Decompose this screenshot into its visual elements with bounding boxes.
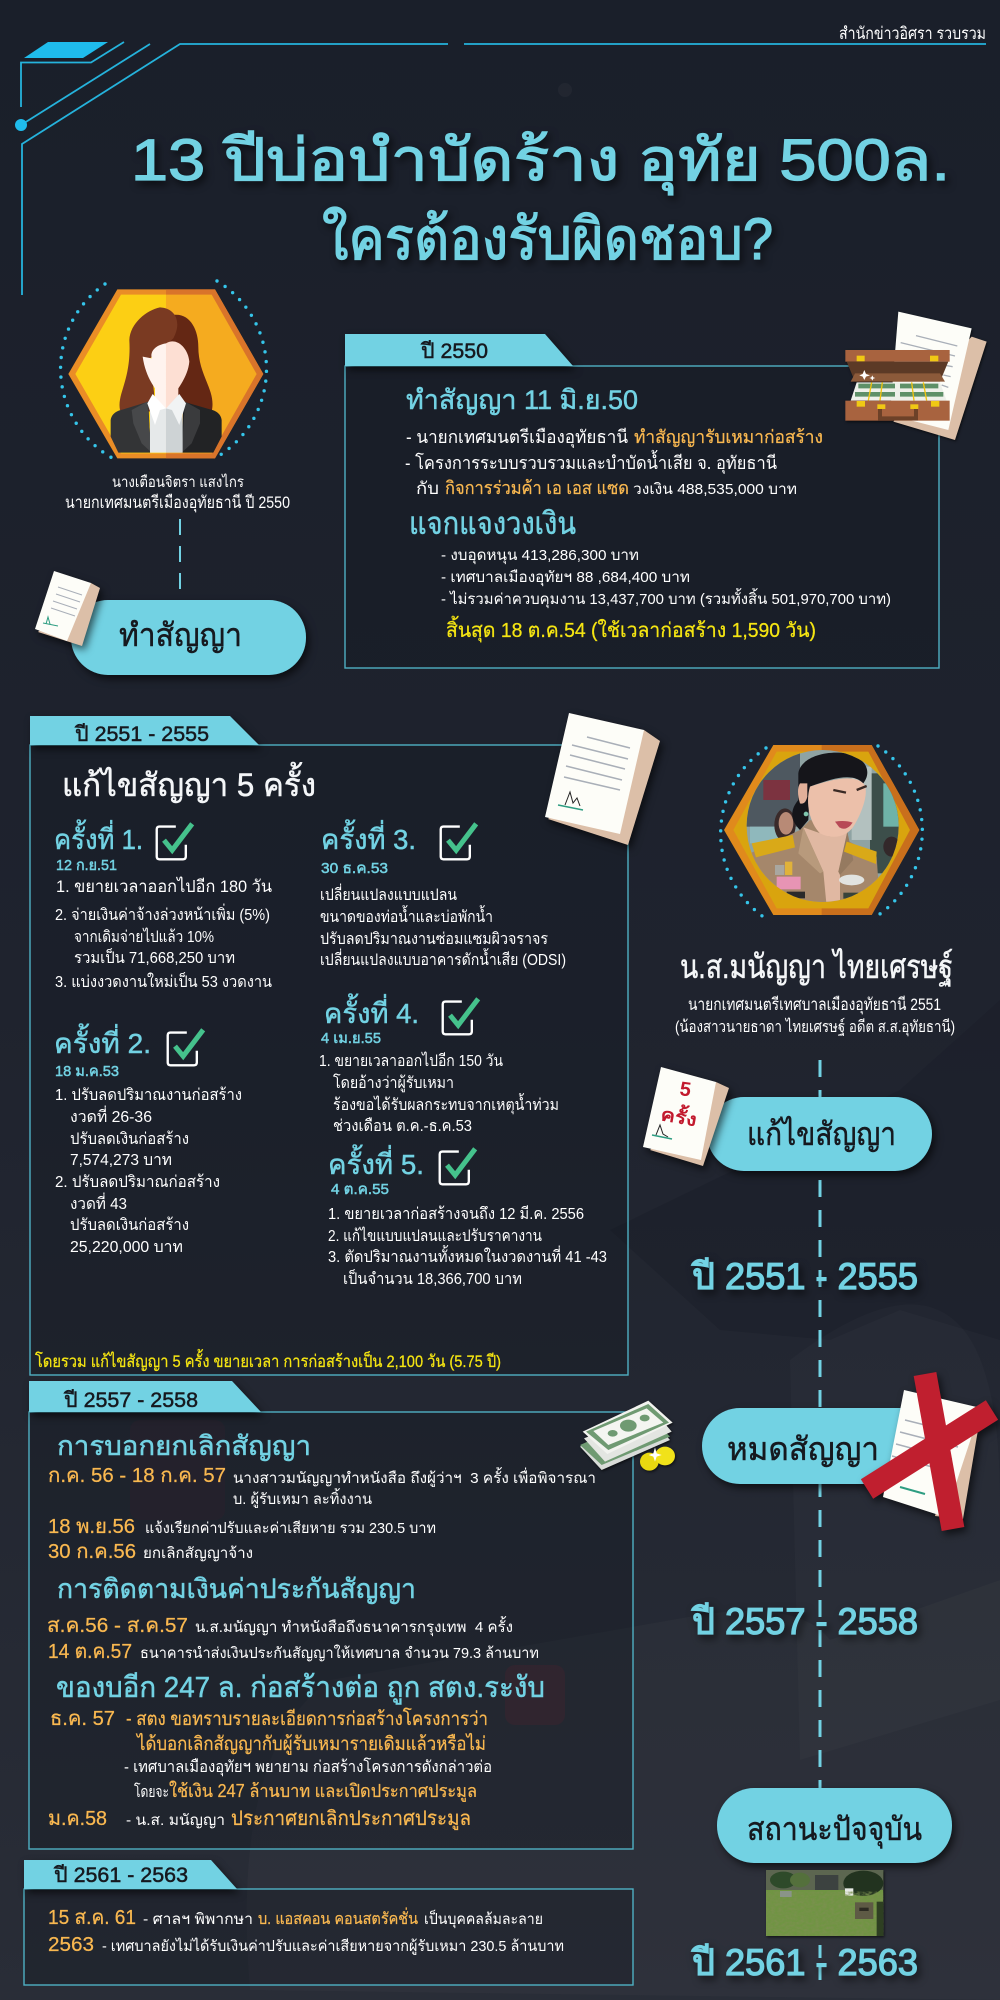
amendment 2: 18 ม.ค.53 [55, 1063, 119, 1080]
pill: contract expired: หมดสัญญา [727, 1431, 879, 1467]
amendment 3: 30 ธ.ค.53 [321, 860, 388, 877]
text: contract details: วงเงิน 488,535,000 บาท [633, 481, 797, 498]
amendment 4: 1. ขยายเวลาออกไปอีก 150 วัน [319, 1051, 503, 1070]
section: additional budget: ได้บอกเลิกสัญญากับผู้รับเหมารายเดิมแล้วหรือไม่ [135, 1733, 486, 1755]
photo: abandoned site [766, 1870, 883, 1936]
pill: current status [717, 1788, 952, 1863]
text: contract details: - นายกเทศมนตรีเมืองอุทัยธานี [406, 427, 628, 448]
amendment 1 [54, 819, 272, 991]
amendment 4: ครั้งที่ 4. [324, 993, 419, 1029]
text: court ruling [48, 1907, 543, 1929]
text: court ruling: บ. แอสคอน คอนสตรัคชั่น [258, 1907, 418, 1928]
pill: sign contract: ทำสัญญา [119, 617, 242, 653]
title [131, 128, 950, 272]
tab: year 2551-2555 [30, 716, 259, 746]
amendment 2: ปรับลดเงินก่อสร้าง [70, 1130, 189, 1148]
section: contract termination: ก.ค. 56 - 18 ก.ค. 57 [48, 1465, 226, 1487]
first mayor name: นางเตือนจิตรา แสงไกร [112, 473, 244, 491]
amendment 4: โดยอ้างว่าผู้รับเหมา [333, 1073, 454, 1093]
text: budget list: - ไม่รวมค่าควบคุมงาน 13,437,700 บาท (รวมทั้งสิ้น 501,970,700 บาท) [441, 588, 891, 609]
icon: paper five times: 5 [678, 1078, 692, 1101]
amendment 5: ครั้งที่ 5. [328, 1144, 424, 1180]
heading: contract date: ทำสัญญา 11 มิ.ย.50 [406, 385, 638, 415]
tab: year 2561-2563 [24, 1860, 237, 1889]
pill: sign contract [71, 600, 306, 675]
timeline dashed line [818, 1060, 822, 1982]
second mayor name [675, 948, 955, 1037]
text: contract details: - โครงการระบบรวบรวมและบำบัดน้ำเสีย จ. อุทัยธานี [405, 450, 777, 474]
text: court ruling: - ศาลฯ พิพากษา [143, 1911, 253, 1928]
section: additional budget: - น.ส. มนัญญา [126, 1812, 225, 1829]
second mayor name: นายกเทศมนตรีเทศบาลเมืองอุทัยธานี 2551 [688, 995, 941, 1015]
amendment 4 [319, 993, 559, 1135]
icon: contract paper large [545, 713, 660, 845]
text: contract end: สิ้นสุด 18 ต.ค.54 (ใช้เวลาก่อสร้าง 1,590 วัน) [446, 616, 816, 643]
section: contract termination: การบอกยกเลิกสัญญา [57, 1431, 311, 1461]
amendment 1: 2. จ่ายเงินค่าจ้างล่วงหน้าเพิ่ม (5%) [55, 903, 270, 924]
panel: year 2550 [345, 334, 939, 668]
year label 2557-2558: ปี 2557 - 2558 [691, 1601, 918, 1642]
section: contract guarantee: น.ส.มนัญญา ทำหนังสือถึงธนาคารกรุงเทพ 4 ครั้ง [195, 1616, 513, 1637]
text: budget list: - งบอุดหนุน 413,286,300 บาท [441, 547, 639, 565]
section: contract guarantee [47, 1574, 539, 1663]
amendment 2: 1. ปรับลดปริมาณงานก่อสร้าง [55, 1086, 242, 1104]
icon: contract paper small [35, 571, 100, 646]
section: additional budget: ใช้เงิน 247 ล้านบาท และเปิดประกาศประมูล [169, 1780, 477, 1802]
icon: paper five times: ครั้ง [659, 1100, 699, 1130]
section: contract guarantee: ธนาคารนำส่งเงินประกันสัญญาให้เทศบาล จำนวน 79.3 ล้านบาท [140, 1644, 539, 1662]
heading: amended five times: แก้ไขสัญญา 5 ครั้ง [62, 762, 316, 803]
amendment 1: 1. ขยายเวลาออกไปอีก 180 วัน [56, 876, 272, 896]
section: additional budget: ธ.ค. 57 [50, 1708, 115, 1730]
section: contract termination: บ. ผู้รับเหมา ละทิ้งงาน [233, 1488, 372, 1508]
amendment 3 [320, 819, 566, 969]
text: amendment summary: โดยรวม แก้ไขสัญญา 5 ครั้ง ขยายเวลา การก่อสร้างเป็น 2,100 วัน (5.75 ปี) [35, 1349, 501, 1371]
amendment 5: เป็นจำนวน 18,366,700 บาท [343, 1268, 522, 1288]
amendment 1: 12 ก.ย.51 [56, 857, 117, 874]
year label 2551-2555: ปี 2551 - 2555 [691, 1256, 918, 1297]
amendment 2: 2. ปรับลดปริมาณก่อสร้าง [55, 1173, 220, 1191]
section: contract termination: นางสาวมนัญญาทำหนังสือ ถึงผู้ว่าฯ 3 ครั้ง เพื่อพิจารณา [233, 1467, 596, 1487]
tab: year 2551-2555: ปี 2551 - 2555 [74, 723, 209, 746]
tab: year 2561-2563: ปี 2561 - 2563 [53, 1864, 188, 1887]
section: contract termination: ยกเลิกสัญญาจ้าง [143, 1545, 253, 1562]
section: contract termination: 18 พ.ย.56 [48, 1516, 135, 1538]
amendment 1: ครั้งที่ 1. [54, 819, 143, 855]
pill: amend contract: แก้ไขสัญญา [747, 1116, 896, 1152]
year label 2561-2563: ปี 2561 - 2563 [691, 1942, 918, 1983]
amendment 4: 4 เม.ย.55 [321, 1030, 381, 1047]
portrait: first mayor hexagon [61, 281, 266, 459]
section: contract guarantee: 14 ต.ค.57 [48, 1641, 132, 1663]
amendment 2: 7,574,273 บาท [70, 1152, 172, 1169]
icon: cancelled contract [867, 1374, 992, 1529]
amendment 2: ครั้งที่ 2. [54, 1023, 151, 1059]
first mayor name: นายกเทศมนตรีเมืองอุทัยธานี ปี 2550 [65, 493, 290, 513]
connector: first mayor to contract [179, 519, 181, 600]
portrait: second mayor hexagon [721, 745, 922, 918]
text: court ruling: เป็นบุคคลล้มละลาย [424, 1909, 543, 1929]
amendment 3: เปลี่ยนแปลงแบบแปลน [320, 883, 457, 904]
first mayor name [65, 473, 290, 513]
amendment 3: ขนาดของท่อน้ำและบ่อพักน้ำ [320, 905, 493, 926]
text: contract details: กับ [416, 479, 439, 498]
section: contract termination: 30 ก.ค.56 [48, 1541, 136, 1563]
section: contract guarantee: ส.ค.56 - ส.ค.57 [47, 1615, 188, 1637]
title: 13 ปีบ่อบำบัดร้าง อุทัย 500ล. [131, 128, 950, 196]
amendment 2: งวดที่ 43 [70, 1192, 127, 1213]
text: 2563 status: 2563 [48, 1934, 94, 1956]
amendment 3: ปรับลดปริมาณงานซ่อมแซมผิวจราจร [320, 931, 548, 948]
amendment 2: 25,220,000 บาท [70, 1239, 183, 1256]
title: ใครต้องรับผิดชอบ? [322, 206, 773, 272]
amendment 2: งวดที่ 26-36 [70, 1105, 152, 1126]
corner decoration lines [15, 42, 986, 295]
text: 2563 status [48, 1934, 564, 1956]
panel: year 2551-2555 [30, 716, 628, 1375]
amendment 2 [54, 1023, 242, 1256]
section: additional budget: ม.ค.58 [48, 1808, 107, 1830]
amendment 1: 3. แบ่งงวดงานใหม่เป็น 53 งวดงาน [55, 971, 272, 991]
tab: year 2550: ปี 2550 [420, 340, 488, 363]
icon: briefcase of cash with paper [845, 312, 987, 440]
section: additional budget: - สตง ขอทราบรายละเอียดการก่อสร้างโครงการว่า [126, 1707, 488, 1730]
amendment 3: ครั้งที่ 3. [321, 819, 416, 855]
icon: stack of money with coins [580, 1401, 675, 1471]
tab: year 2557-2558: ปี 2557 - 2558 [63, 1389, 198, 1412]
amendment 4: ร้องขอได้รับผลกระทบจากเหตุน้ำท่วม [333, 1093, 559, 1115]
pill: contract expired [702, 1408, 942, 1484]
pill: current status: สถานะปัจจุบัน [747, 1811, 922, 1849]
section: additional budget: โดยจะ [134, 1782, 169, 1801]
section: contract guarantee: การติดตามเงินค่าประกันสัญญา [57, 1574, 416, 1604]
section: contract termination [48, 1431, 596, 1563]
text: contract details: กิจการร่วมค้า เอ เอส แซด [445, 478, 629, 498]
tab: year 2550 [345, 334, 573, 366]
amendment 5: 4 ต.ค.55 [331, 1181, 389, 1198]
tab: year 2557-2558 [29, 1381, 261, 1412]
amendment 1: จากเดิมจ่ายไปแล้ว 10% [74, 927, 214, 946]
text: budget list: - เทศบาลเมืองอุทัยฯ 88 ,684,400 บาท [441, 569, 690, 587]
section: additional budget: ของบอีก 247 ล. ก่อสร้างต่อ ถูก สตง.ระงับ [56, 1672, 545, 1705]
text: budget list [441, 547, 891, 609]
amendment 3: เปลี่ยนแปลงแบบอาคารดักน้ำเสีย (ODSI) [320, 948, 566, 969]
amendment 5: 1. ขยายเวลาก่อสร้างจนถึง 12 มี.ค. 2556 [328, 1205, 584, 1223]
text: contract details [405, 427, 823, 498]
panel: year 2557-2558 [29, 1381, 633, 1849]
amendment 1: รวมเป็น 71,668,250 บาท [74, 947, 235, 967]
section: additional budget: - เทศบาลเมืองอุทัยฯ พยายาม ก่อสร้างโครงการดังกล่าวต่อ [124, 1757, 492, 1777]
section: contract termination: แจ้งเรียกค่าปรับและค่าเสียหาย รวม 230.5 บาท [145, 1520, 436, 1537]
section: additional budget [48, 1672, 545, 1831]
text: court ruling: 15 ส.ค. 61 [48, 1907, 136, 1929]
text: contract details: ทำสัญญารับเหมาก่อสร้าง [634, 427, 823, 447]
heading: budget breakdown: แจกแจงวงเงิน [409, 506, 576, 541]
panel: year 2561-2563 [24, 1860, 633, 1985]
amendment 5: 2. แก้ไขแบบแปลนและปรับราคางาน [328, 1226, 542, 1245]
amendment 5: 3. ตัดปริมาณงานทั้งหมดในงวดงานที่ 41 -43 [328, 1245, 607, 1266]
text: 2563 status: - เทศบาลยังไม่ได้รับเงินค่าปรับและค่าเสียหายจากผู้รับเหมา 230.5 ล้านบาท [102, 1937, 564, 1955]
icon: paper five times [643, 1067, 729, 1166]
amendment 5 [328, 1144, 607, 1288]
pill: amend contract [707, 1097, 932, 1171]
amendment 4: ช่วงเดือน ต.ค.-ธ.ค.53 [333, 1117, 472, 1135]
section: additional budget: ประกาศยกเลิกประกาศประมูล [231, 1808, 471, 1831]
amendment 2: ปรับลดเงินก่อสร้าง [70, 1216, 189, 1234]
